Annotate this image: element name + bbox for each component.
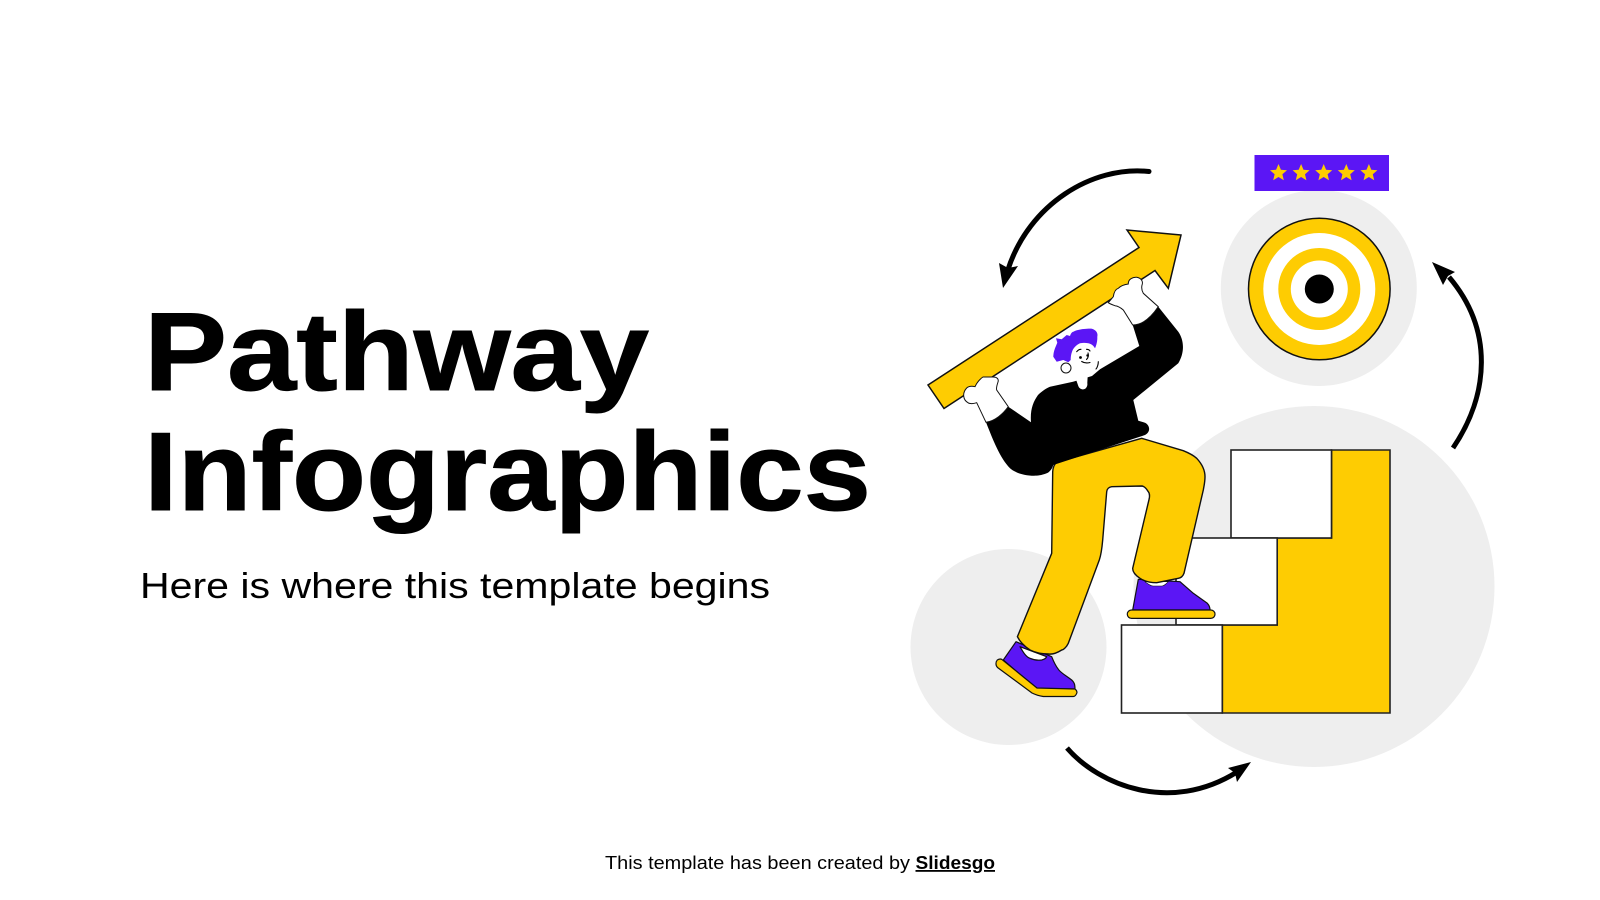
- hand: left: [964, 377, 1008, 422]
- target: [1248, 218, 1390, 360]
- footer credit: Slidesgo: [916, 853, 995, 873]
- footer credit: This template has been created by: [605, 853, 910, 873]
- title: Infographics: [144, 410, 871, 534]
- stair blocks: [1122, 450, 1390, 713]
- hair: [1053, 329, 1098, 362]
- background circle: large: [1134, 406, 1494, 767]
- big yellow arrow: [928, 230, 1181, 408]
- icon: five stars: [1270, 164, 1377, 180]
- trousers: [1017, 438, 1205, 654]
- title: [144, 290, 871, 534]
- rating banner: [1254, 155, 1389, 191]
- illustration: [910, 155, 1494, 793]
- character: [928, 230, 1215, 696]
- head: [1053, 329, 1098, 389]
- face: [1071, 343, 1098, 374]
- hand: right: [1108, 277, 1158, 325]
- lower shoe: [996, 642, 1077, 696]
- background circle: target: [1221, 190, 1417, 386]
- arrow: cycle top left: [999, 171, 1149, 288]
- face features: [1077, 349, 1098, 369]
- sweater: [986, 307, 1183, 476]
- upper shoe: [1127, 579, 1215, 618]
- neck: [1072, 368, 1088, 389]
- title: Pathway: [144, 290, 649, 414]
- background circle: small: [910, 549, 1106, 745]
- subtitle: Here is where this template begins: [140, 565, 770, 606]
- arrow: cycle right: [1432, 262, 1481, 448]
- ear: [1061, 363, 1071, 373]
- arrow: cycle bottom: [1067, 748, 1251, 793]
